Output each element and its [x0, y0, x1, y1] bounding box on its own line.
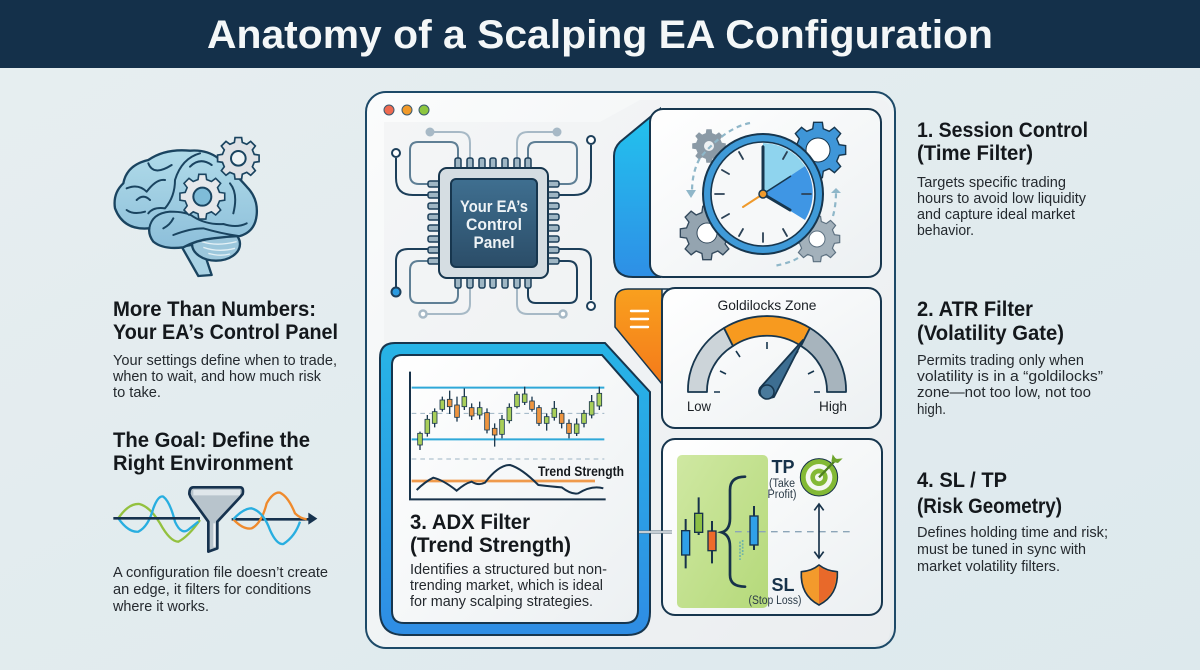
panel: SL and TP	[639, 439, 882, 615]
text: configuration note	[112, 564, 328, 615]
text: SL TP description: market volatility filters.	[917, 558, 1060, 575]
label: trend strength: Trend Strength	[538, 464, 624, 479]
heading: ATR filter: 2. ATR Filter	[917, 297, 1034, 321]
icon: shield	[801, 565, 837, 605]
label: SL stop loss: (Stop Loss)	[748, 595, 802, 607]
icon: clock with gears	[680, 122, 846, 266]
icon: signal funnel	[113, 487, 317, 552]
heading: session control: (Time Filter)	[917, 141, 1033, 165]
heading: more than numbers: Your EA’s Control Panel	[113, 320, 338, 344]
heading: more than numbers	[113, 297, 338, 344]
heading: more than numbers: More Than Numbers:	[113, 297, 316, 321]
heading: the goal	[113, 428, 310, 475]
text: ADX description: Identifies a structured but non-	[410, 561, 607, 578]
panel: ADX filter	[380, 343, 650, 635]
label: high: High	[819, 398, 847, 414]
text: session description: hours to avoid low liquidity	[917, 190, 1086, 207]
text: ATR description	[917, 352, 1103, 418]
text: session description: behavior.	[917, 222, 974, 239]
label: goldilocks zone: Goldilocks Zone	[718, 297, 817, 313]
icon: processor chip: Your EA’s	[460, 198, 528, 216]
text: settings description: Your settings define when to trade,	[113, 352, 337, 369]
text: configuration note: where it works.	[112, 598, 209, 615]
heading: SL TP	[917, 468, 1062, 518]
heading: SL TP: 4. SL / TP	[917, 468, 1007, 492]
label: TP take profit: (Take	[769, 478, 795, 490]
text: configuration note: A configuration file doesn’t create	[113, 564, 328, 581]
heading: SL TP: (Risk Geometry)	[917, 494, 1062, 518]
text: ADX description	[410, 561, 607, 610]
panel: control window	[366, 92, 895, 648]
label: TP take profit	[768, 457, 797, 501]
heading: ADX filter: (Trend Strength)	[410, 533, 571, 557]
heading: session control: 1. Session Control	[917, 118, 1088, 142]
icon: processor chip: Panel	[474, 234, 514, 252]
panel: ATR filter gauge	[615, 288, 881, 428]
text: SL TP description: Defines holding time and risk;	[917, 524, 1108, 541]
icon: circuit traces	[392, 128, 595, 318]
text: SL TP description	[917, 524, 1108, 575]
chart: trade geometry	[682, 454, 853, 605]
icon: brain with gears	[115, 138, 259, 276]
text: settings description	[112, 352, 337, 401]
text: session description: and capture ideal market	[917, 206, 1076, 223]
text: configuration note: an edge, it filters for conditions	[113, 581, 311, 598]
title banner: Anatomy of a Scalping EA Configuration	[207, 13, 993, 57]
heading: ATR filter	[917, 297, 1064, 345]
label: TP take profit: TP	[771, 457, 795, 477]
text: ATR description: Permits trading only when	[917, 352, 1084, 369]
text: settings description: when to wait, and how much risk	[112, 368, 321, 385]
text: session description: Targets specific trading	[917, 174, 1066, 191]
label: low: Low	[687, 398, 712, 414]
text: session description	[917, 174, 1086, 239]
text: ADX description: trending market, which is ideal	[410, 577, 603, 594]
text: ATR description: zone—not too low, not too	[917, 384, 1091, 401]
chart: volatility gauge	[688, 316, 846, 398]
window buttons	[384, 105, 429, 115]
icon: processor chip: Control	[466, 216, 522, 234]
heading: the goal: The Goal: Define the	[113, 428, 310, 452]
text: ATR description: volatility is in a “goldilocks”	[917, 368, 1103, 385]
heading: ADX filter	[410, 510, 571, 557]
panel: session control	[614, 109, 881, 277]
heading: ATR filter: (Volatility Gate)	[917, 321, 1064, 345]
title banner	[0, 0, 1200, 68]
text: ADX description: for many scalping strategies.	[410, 593, 593, 610]
chart: candlestick range and trend strength	[410, 372, 606, 499]
heading: session control	[917, 118, 1088, 165]
heading: ADX filter: 3. ADX Filter	[410, 510, 531, 534]
text: ATR description: high.	[917, 401, 946, 418]
label: TP take profit: Profit)	[768, 489, 797, 501]
label: SL stop loss: SL	[771, 575, 795, 595]
text: SL TP description: must be tuned in sync with	[917, 541, 1086, 558]
heading: the goal: Right Environment	[113, 451, 293, 475]
icon: processor chip	[428, 158, 559, 288]
icon: target	[800, 454, 843, 496]
label: SL stop loss	[748, 575, 802, 607]
text: settings description: to take.	[113, 384, 161, 401]
